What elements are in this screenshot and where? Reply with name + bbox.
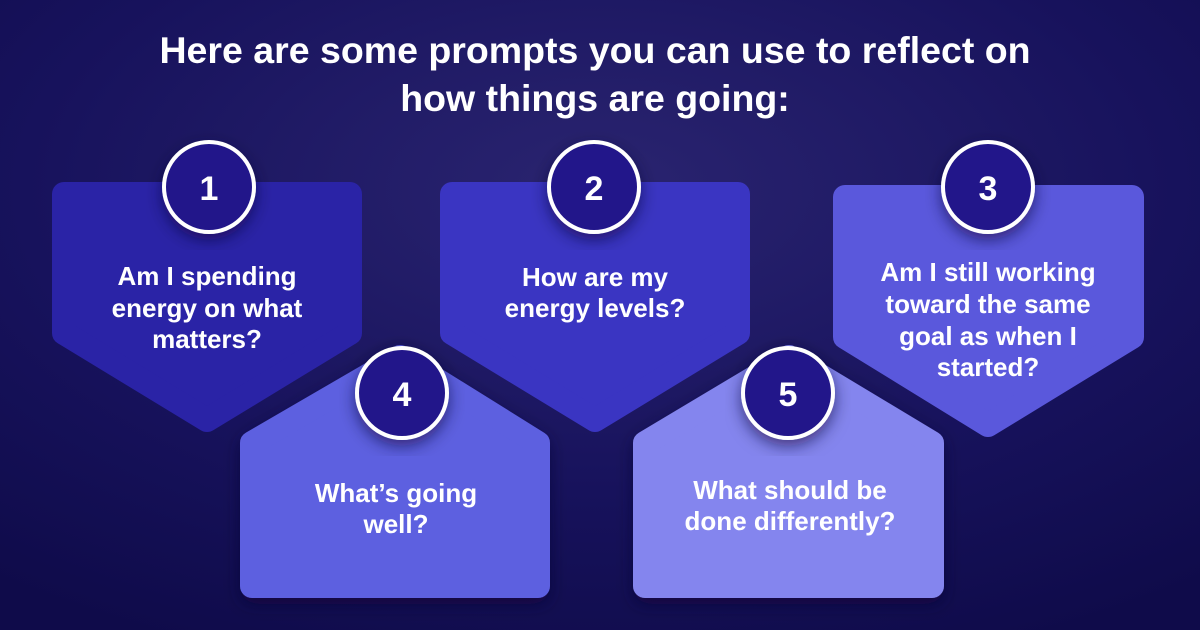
panel: prompt 2: How are my bbox=[522, 262, 669, 292]
panel: prompt 5: done differently? bbox=[685, 506, 895, 536]
badge 2: 2 bbox=[585, 170, 603, 208]
panel: prompt 4: What’s going bbox=[315, 478, 477, 508]
badge 3 bbox=[943, 142, 1033, 232]
badge 1 bbox=[164, 142, 254, 232]
panel: prompt 3: Am I still working bbox=[880, 257, 1096, 287]
badge 5: 5 bbox=[779, 376, 797, 414]
panel: prompt 3: started? bbox=[937, 352, 1039, 382]
panel: prompt 3 bbox=[845, 197, 1132, 425]
panel: prompt 1: energy on what bbox=[112, 293, 303, 323]
panel: prompt 1: Am I spending bbox=[117, 261, 297, 291]
panel: prompt 5 bbox=[645, 357, 932, 586]
panel: prompt 5: What should be bbox=[693, 475, 887, 505]
panel: prompt 2 bbox=[452, 194, 738, 420]
title bbox=[159, 29, 1031, 119]
badge 3: 3 bbox=[979, 170, 997, 208]
badge 4: 4 bbox=[393, 376, 412, 414]
panel: prompt 1: matters? bbox=[152, 324, 262, 354]
badge 2 bbox=[549, 142, 639, 232]
panel: prompt 1 bbox=[64, 194, 350, 420]
panel: prompt 4: well? bbox=[362, 509, 429, 539]
panel: prompt 2: energy levels? bbox=[505, 293, 685, 323]
panel: prompt 3: toward the same bbox=[885, 289, 1091, 319]
title: how things are going: bbox=[400, 77, 790, 119]
badge 4 bbox=[357, 348, 447, 438]
title: Here are some prompts you can use to reflect on bbox=[159, 29, 1031, 71]
panel: prompt 3: goal as when I bbox=[899, 321, 1077, 351]
badge 5 bbox=[743, 348, 833, 438]
panel: prompt 4 bbox=[252, 357, 538, 586]
badge 1: 1 bbox=[200, 170, 218, 208]
